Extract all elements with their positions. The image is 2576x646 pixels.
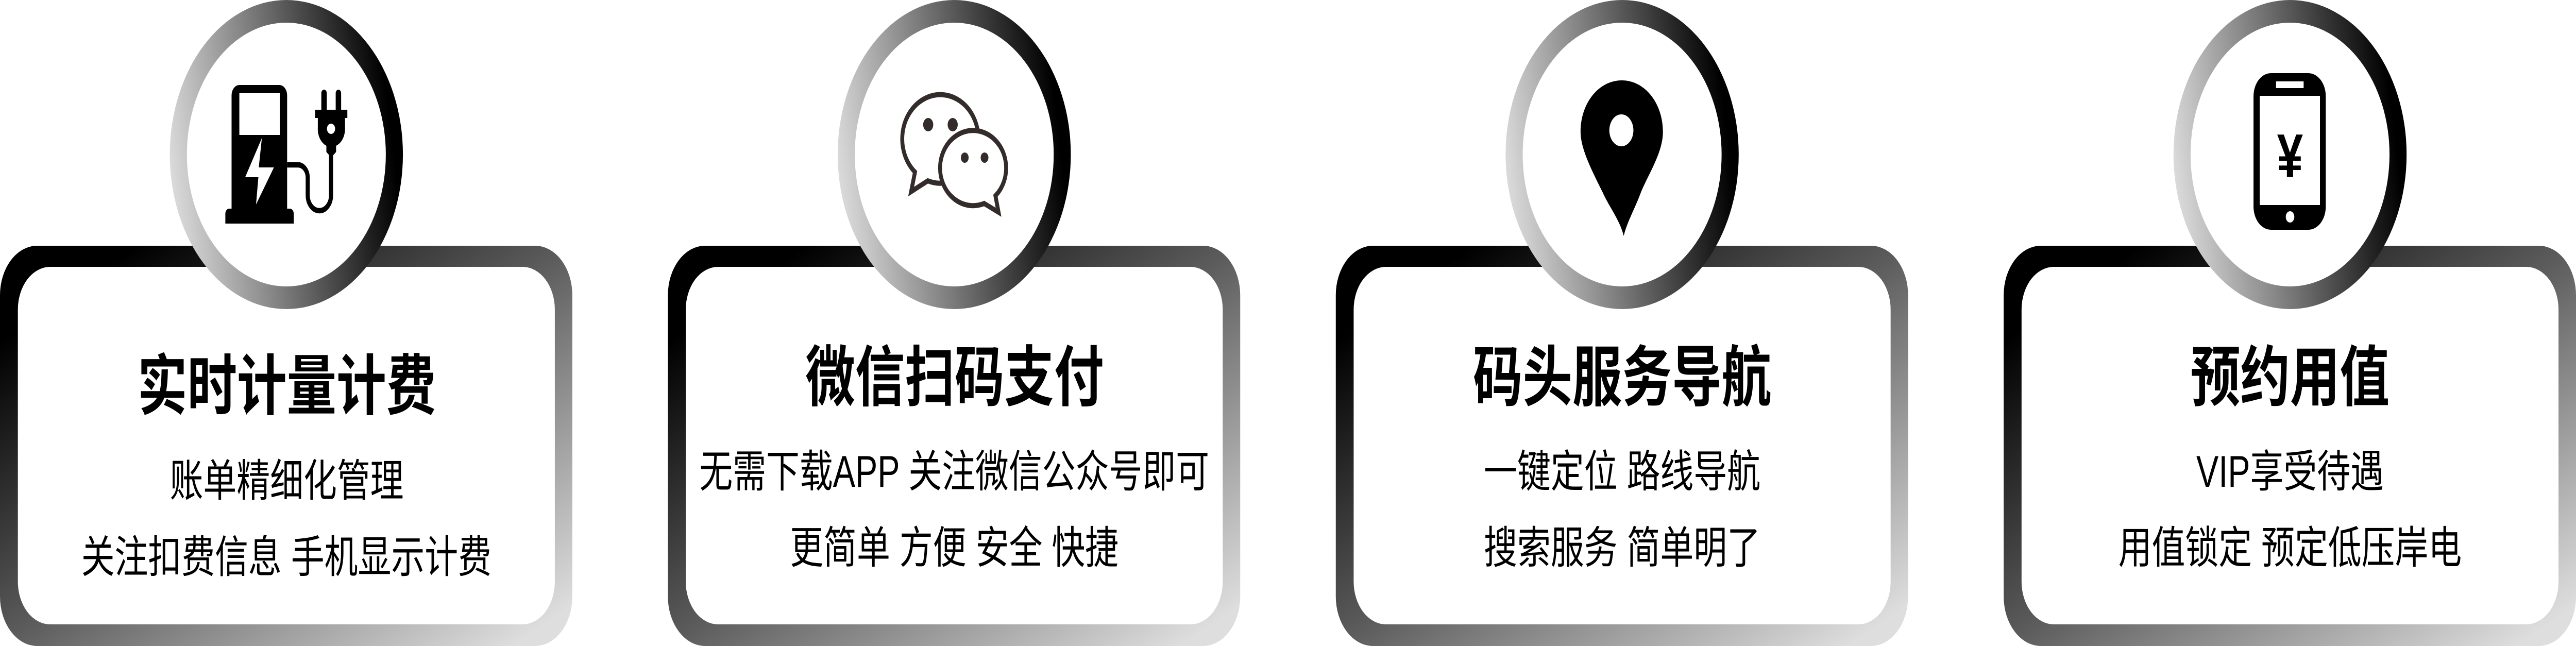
icon ring (1505, 0, 1739, 309)
title: 微信扫码支付 (805, 341, 1104, 415)
panel: WeChat scan payment (668, 0, 1240, 646)
icon: chat bubbles (902, 95, 1006, 212)
icon ring (170, 0, 403, 309)
card frame (2004, 246, 2576, 646)
icon: phone with yen sign (2253, 73, 2326, 230)
description line 1: VIP享受待遇 (2196, 447, 2384, 497)
description line 2: 用值锁定 预定低压岸电 (2119, 523, 2462, 573)
description line 2: 更简单 方便 安全 快捷 (790, 523, 1118, 573)
icon: phone with yen sign: ¥ (2277, 122, 2303, 191)
description line 1: 无需下载APP 关注微信公众号即可 (699, 447, 1209, 497)
title: 码头服务导航 (1473, 341, 1771, 415)
description line 2: 搜索服务 简单明了 (1484, 523, 1760, 573)
title: 预约用值 (2191, 341, 2389, 415)
panel: dock navigation (1336, 0, 1908, 646)
description line 1: 账单精细化管理 (170, 456, 404, 506)
description line 2: 关注扣费信息 手机显示计费 (81, 533, 492, 582)
icon ring (838, 0, 1071, 309)
icon ring (2174, 0, 2406, 309)
panel: reserved capacity (2004, 0, 2576, 646)
icon: charging station with plug (225, 85, 347, 224)
card frame (1336, 246, 1908, 646)
icon: map pin (1581, 80, 1663, 236)
description line 1: 一键定位 路线导航 (1484, 447, 1760, 497)
title: 实时计量计费 (138, 350, 436, 423)
card frame (668, 246, 1240, 646)
card frame (0, 246, 572, 646)
panel: real-time metering (0, 0, 572, 646)
